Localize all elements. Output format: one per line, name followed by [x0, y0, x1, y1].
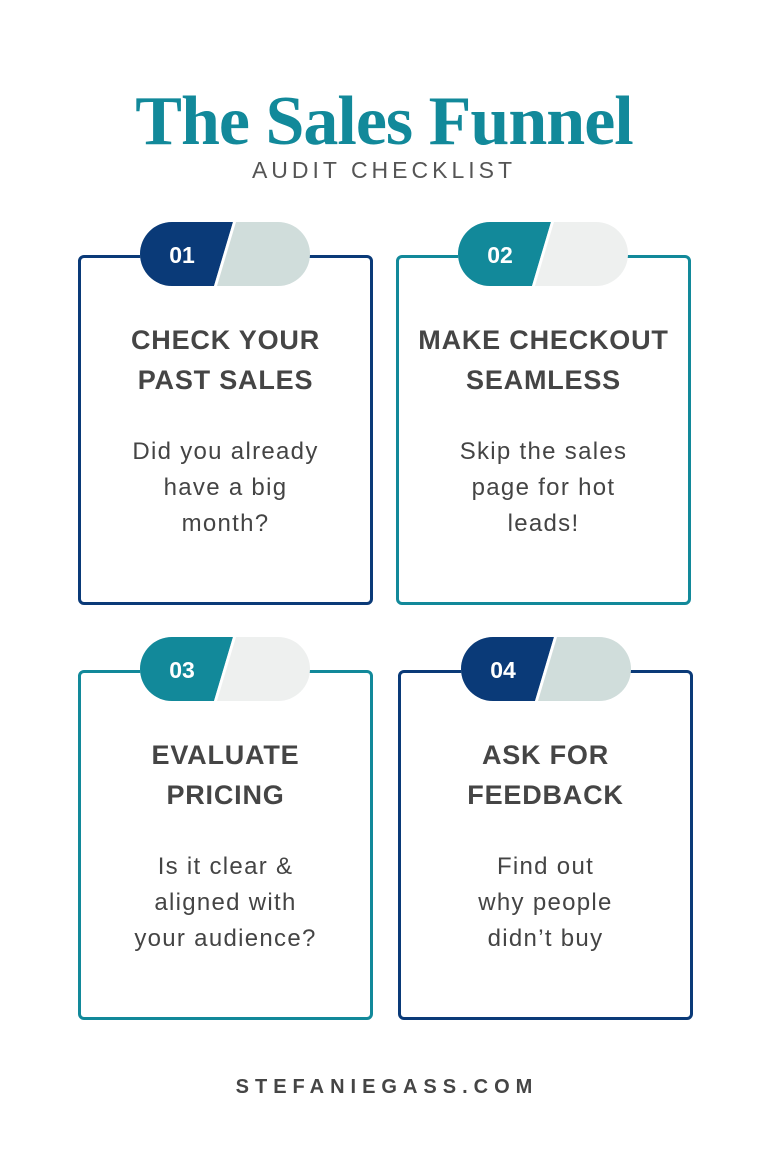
text: your audience? [134, 925, 317, 952]
subtitle: AUDIT CHECKLIST [252, 157, 516, 183]
text: page for hot [472, 474, 615, 501]
text [460, 438, 627, 537]
heading: CHECK YOUR [131, 325, 320, 355]
heading: FEEDBACK [467, 780, 624, 810]
text: Is it clear & [158, 853, 293, 880]
panel: card 02 [396, 255, 691, 605]
heading: ASK FOR [482, 740, 609, 770]
heading [152, 740, 299, 810]
heading: MAKE CHECKOUT [418, 325, 669, 355]
text: have a big [164, 474, 287, 501]
badge 04 [461, 637, 631, 701]
badge 02: 02 [487, 242, 513, 268]
heading [131, 325, 320, 395]
badge 03: 03 [169, 657, 195, 683]
heading [467, 740, 624, 810]
text [134, 853, 317, 952]
text: didn’t buy [488, 925, 603, 952]
badge 01 [140, 222, 310, 286]
heading [418, 325, 669, 395]
heading: PAST SALES [138, 365, 313, 395]
panel: card 03 [78, 670, 373, 1020]
heading: SEAMLESS [466, 365, 621, 395]
text: leads! [508, 510, 579, 537]
text: aligned with [154, 889, 297, 916]
text: Skip the sales [460, 438, 627, 465]
text: why people [478, 889, 613, 916]
badge 03 [140, 637, 310, 701]
text [478, 853, 613, 952]
badge 04: 04 [490, 657, 516, 683]
text: Find out [497, 853, 594, 880]
panel: card 04 [398, 670, 693, 1020]
badge 01: 01 [169, 242, 195, 268]
text [132, 438, 319, 537]
heading: PRICING [166, 780, 285, 810]
title: The Sales Funnel [135, 83, 633, 160]
badge 02 [458, 222, 628, 286]
footer: STEFANIEGASS.COM [236, 1076, 538, 1098]
heading: EVALUATE [152, 740, 299, 770]
panel: card 01 [78, 255, 373, 605]
text: Did you already [132, 438, 319, 465]
text: month? [182, 510, 269, 537]
